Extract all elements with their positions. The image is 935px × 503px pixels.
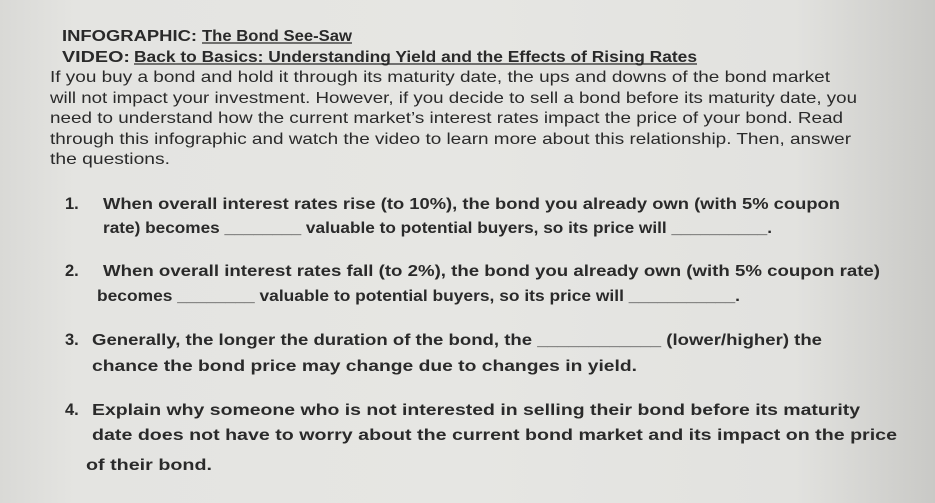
- intro paragraph: [49, 69, 857, 168]
- question 1: 1.: [65, 195, 79, 213]
- question 2: 2.: [65, 262, 79, 280]
- question 3: chance the bond price may change due to changes in yield.: [92, 358, 637, 375]
- video line: Back to Basics: Understanding Yield and the Effects of Rising Rates: [134, 49, 697, 66]
- question 4: 4.: [65, 401, 79, 419]
- question 3: [65, 331, 822, 375]
- question 1: [65, 195, 840, 237]
- question 3: Generally, the longer the duration of the bond, the ____________ (lower/higher) the: [92, 332, 822, 349]
- title: INFOGRAPHIC:: [62, 28, 197, 45]
- title: The Bond See-Saw: [202, 28, 353, 45]
- question 2: becomes ________ valuable to potential buyers, so its price will ___________.: [97, 288, 740, 305]
- title: [62, 28, 353, 45]
- question 2: When overall interest rates fall (to 2%), the bond you already own (with 5% coupon rate): [103, 263, 880, 280]
- question 1: When overall interest rates rise (to 10%), the bond you already own (with 5% coupon: [103, 196, 840, 213]
- intro paragraph: If you buy a bond and hold it through its maturity date, the ups and downs of the bond market: [50, 69, 831, 86]
- question 4: of their bond.: [86, 457, 212, 474]
- video line: VIDEO:: [62, 49, 130, 66]
- question 3: 3.: [65, 331, 79, 349]
- question 4: date does not have to worry about the current bond market and its impact on the price: [92, 427, 897, 444]
- intro paragraph: through this infographic and watch the video to learn more about this relationship. Then, answer: [50, 131, 852, 148]
- question 2: [65, 262, 880, 305]
- question 4: Explain why someone who is not interested in selling their bond before its maturity: [92, 402, 860, 419]
- question 4: [65, 401, 897, 474]
- intro paragraph: will not impact your investment. However, if you decide to sell a bond before its maturity date, you: [49, 90, 857, 107]
- question 1: rate) becomes ________ valuable to potential buyers, so its price will __________.: [103, 220, 772, 237]
- intro paragraph: need to understand how the current market’s interest rates impact the price of your bond. Read: [50, 110, 843, 127]
- intro paragraph: the questions.: [50, 151, 170, 168]
- header block: [62, 28, 697, 66]
